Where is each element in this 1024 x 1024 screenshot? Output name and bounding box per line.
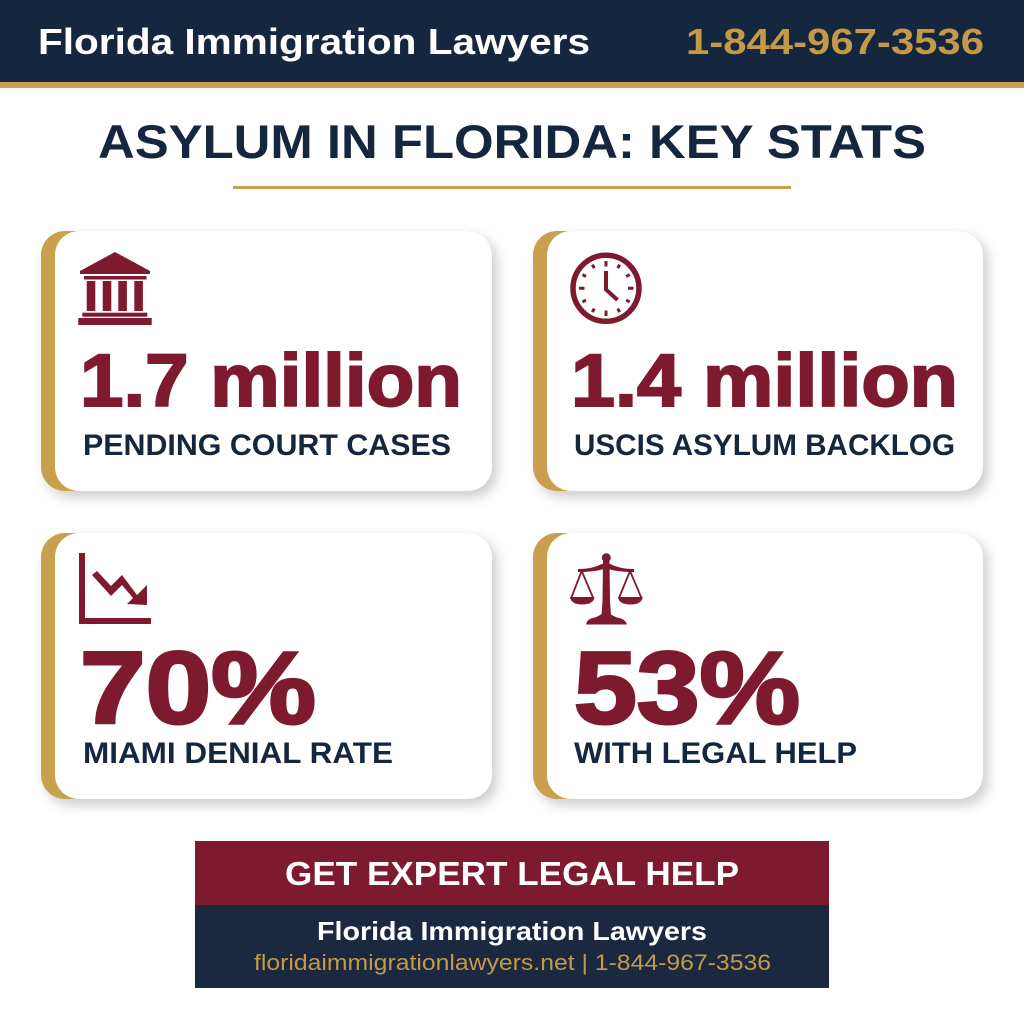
panel: pending court cases: [41, 231, 492, 491]
call to action banner: [195, 841, 829, 988]
label: Miami denial rate: MIAMI DENIAL RATE: [83, 737, 393, 770]
panel: Miami denial rate: [41, 533, 492, 799]
title: ASYLUM IN FLORIDA: KEY STATS: [98, 115, 926, 168]
icon: scales of justice: [570, 553, 643, 624]
label: USCIS asylum backlog: USCIS ASYLUM BACKLOG: [574, 429, 955, 462]
stat: 1.4 million: 1.4 million: [571, 339, 958, 422]
banner contact details: floridaimmigrationlawyers.net | 1-844-967-3536: [254, 950, 771, 975]
header phone number: 1-844-967-3536: [686, 21, 984, 62]
stat: 53%: 53%: [574, 631, 800, 745]
banner heading: GET EXPERT LEGAL HELP: [285, 855, 739, 892]
panel: USCIS asylum backlog: [533, 231, 983, 491]
label: with legal help: WITH LEGAL HELP: [574, 737, 857, 770]
panel: with legal help: [533, 533, 983, 799]
header firm name: Florida Immigration Lawyers: [38, 21, 590, 62]
icon: courthouse: [78, 252, 152, 325]
icon: declining chart: [79, 553, 151, 624]
header bar: [0, 0, 1024, 88]
stat: 70%: 70%: [80, 631, 316, 745]
stat: 1.7 million: 1.7 million: [80, 339, 462, 422]
banner firm name: Florida Immigration Lawyers: [317, 916, 707, 946]
icon: clock: [573, 255, 639, 321]
label: pending court cases: PENDING COURT CASES: [83, 429, 451, 462]
